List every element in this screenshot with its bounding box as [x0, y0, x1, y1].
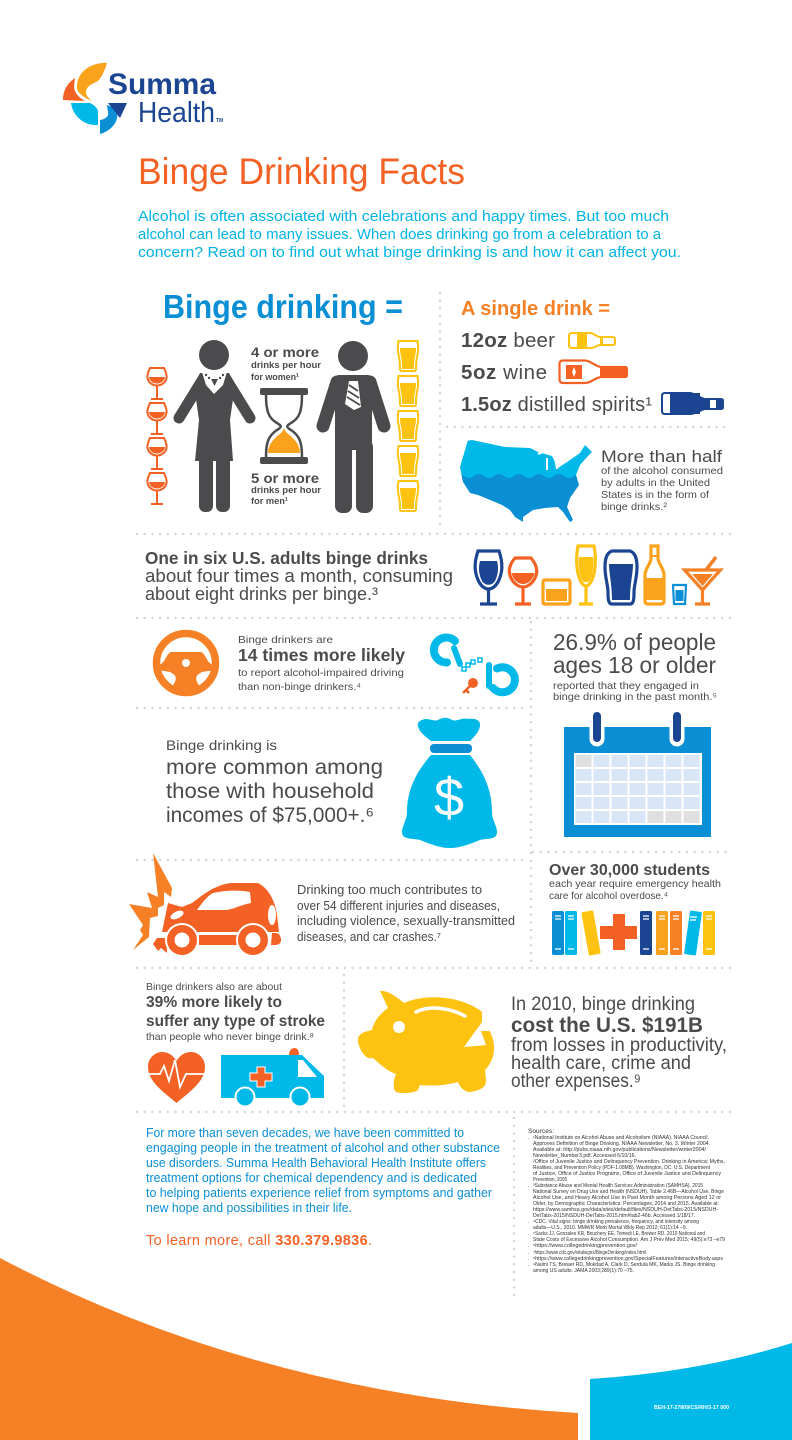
text: 4 or more: 4 or more — [251, 344, 319, 360]
text: over 30,000 students: Over 30,000 students — [549, 862, 710, 879]
sources: . — [528, 1243, 529, 1249]
sources: https://www.samhsa.gov/data/sites/default/files/NSDUH-DetTabs-2015/NSDUH- — [533, 1207, 718, 1213]
intro text: alcohol can lead to many issues. When does drinking go from a celebration to a — [138, 227, 662, 243]
text: more than half: More than half — [601, 447, 722, 466]
sources: National Survey on Drug Use and Health (NSDUH). Table 2.46B—Alcohol Use, Binge — [533, 1189, 724, 1195]
icon: broken piggy bank — [358, 991, 500, 1093]
icon: woman — [179, 340, 250, 512]
heading: a single drink =: A single drink = — [461, 298, 610, 320]
icon: row of drinks — [475, 546, 720, 604]
icon: lightning crash — [129, 853, 172, 950]
text: 14 times: Binge drinkers are — [238, 634, 333, 646]
text: 1.5oz distilled spirits: 1.5oz distilled spirits¹ — [461, 394, 652, 416]
text: 54 injuries: Drinking too much contributes to — [297, 883, 482, 897]
text: over 30,000 students — [549, 862, 721, 902]
text: cost $191B: cost the U.S. $191B — [511, 1013, 703, 1037]
text: cost $191B: In 2010, binge drinking — [511, 994, 695, 1015]
text: 14 times: than non-binge drinkers.⁴ — [238, 681, 361, 693]
text: 14 times: 14 times more likely — [238, 645, 405, 665]
icon: car — [153, 883, 281, 957]
footer: blue panel with job code — [590, 1343, 792, 1440]
sources: . — [528, 1250, 529, 1256]
text: 5 or more: drinks per hour — [251, 485, 321, 496]
text: more common: incomes of $75,000+.⁶ — [166, 804, 374, 827]
sources: State Costs of Excessive Alcohol Consumption. Am J Prev Med 2015; 49(5):e73 –e79 — [533, 1237, 725, 1243]
logo: Summa Health: TM — [216, 118, 223, 124]
text: 4 or more: drinks per hour — [251, 360, 321, 371]
text: 39 percent: 39% more likely to — [146, 994, 282, 1011]
icon: ambulance — [221, 1048, 324, 1106]
text: 14 times — [238, 634, 405, 693]
call to action: To learn more, call 330.379.9836. — [146, 1233, 372, 1249]
text block: behavioral health institute: engaging people in the treatment of alcohol and other substance — [146, 1141, 500, 1155]
text: 5 or more: for men¹ — [251, 496, 288, 507]
panel: a single drink — [461, 298, 723, 416]
sources: Available at: http://pubs.niaaa.nih.gov/publications/Newsletter/winter2004/ — [533, 1147, 707, 1153]
text: 26.9 percent: 26.9% of people — [553, 629, 716, 655]
text: one in six adults: about eight drinks per binge.³ — [145, 584, 378, 604]
heading: binge drinking =: Binge drinking = — [163, 288, 403, 325]
panel: more than half — [460, 440, 722, 522]
icon: hourglass — [260, 388, 308, 464]
text: 4 or more: for women¹ — [251, 372, 299, 383]
footer: blue panel with job code: BEH-17-27809/CS/RH/3-17 000 — [654, 1405, 729, 1411]
text: 12oz beer: 12oz beer — [461, 329, 555, 352]
panel: household income — [166, 718, 497, 848]
panel: car crash — [129, 853, 515, 957]
sources: adults—U.S., 2010. MMWR Morb Mortal Wkly Rep 2012; 61(1):14 –9. — [533, 1225, 687, 1231]
panel: 26.9 percent — [553, 629, 717, 837]
sources: ⁸https://www.collegedrinkingprevention.gov/SpecialFeatures/interactiveBody.aspx — [533, 1256, 724, 1262]
sources: of Justice, Office of Justice Programs, Office of Juvenile Justice and Delinquency — [533, 1171, 722, 1177]
icon: wine glasses — [147, 368, 167, 504]
icon: steering wheel — [156, 634, 216, 692]
text: cost $191B: from losses in productivity, — [511, 1035, 727, 1056]
panel: 14 times more likely — [156, 634, 515, 693]
icon: beer bottle — [569, 333, 615, 348]
text block: behavioral health institute: new hope and possibilities in their life. — [146, 1201, 352, 1215]
icon: heart with pulse — [148, 1052, 205, 1103]
text: more common: Binge drinking is — [166, 737, 277, 753]
icon: US map — [460, 440, 592, 522]
text: 39 percent: suffer any type of stroke — [146, 1013, 325, 1030]
intro text: concern? Read on to find out what binge drinking is and how it can affect you. — [138, 245, 681, 261]
sources: Realities, and Prevention Policy (PDF-1.08MB). Washington, DC: U.S. Department — [533, 1165, 711, 1171]
text: 5oz wine: 5oz wine — [461, 361, 547, 384]
text: 54 injuries: over 54 different injuries and diseases, — [297, 899, 500, 913]
text: 26.9 percent: binge drinking in the past month.⁵ — [553, 691, 717, 703]
sources: . — [528, 1262, 529, 1268]
intro text — [138, 209, 681, 261]
panel: 30,000 students — [549, 862, 721, 956]
sources: . — [528, 1183, 529, 1189]
sources: DetTabs-2015/NSDUH-DetTabs-2015.htm#tab2-46b. Accessed 1/18/17. — [533, 1213, 695, 1219]
sources: ³Substance Abuse and Mental Health Services Administration (SAMHSA). 2015 — [533, 1183, 703, 1189]
panel: stroke — [146, 981, 325, 1106]
text block: behavioral health institute: use disorders. Summa Health Behavioral Health Institute offers — [146, 1156, 486, 1170]
text: 4 or more — [251, 344, 321, 383]
icon: handcuffs and key — [434, 638, 515, 693]
text: more than half: States is in the form of — [601, 489, 709, 501]
text: more than half: of the alcohol consumed — [601, 465, 723, 477]
text: more than half: by adults in the United — [601, 477, 710, 489]
text: 39 percent: Binge drinkers also are about — [146, 981, 282, 993]
text block: behavioral health institute — [146, 1126, 500, 1215]
text: one in six adults: One in six U.S. adults binge drinks — [145, 548, 428, 568]
text: 39 percent: than people who never binge drink.⁸ — [146, 1031, 314, 1043]
text: cost $191B: health care, crime and — [511, 1053, 691, 1074]
text: more common: more common among — [166, 756, 383, 779]
sources — [528, 1129, 725, 1274]
panel: one in six — [145, 546, 720, 604]
sources: ⁶https://www.collegedrinkingprevention.gov/ — [533, 1243, 638, 1249]
text: 26.9 percent: reported that they engaged in — [553, 680, 699, 692]
panel: binge drinking definition — [147, 288, 418, 513]
text: 54 injuries — [297, 883, 515, 944]
footer: orange swoosh — [0, 1258, 578, 1440]
text: more than half — [601, 447, 723, 513]
icon: money bag: $ — [434, 768, 464, 828]
logo: Summa Health: Summa — [108, 68, 216, 101]
text: more than half: binge drinks.² — [601, 501, 668, 513]
text block: behavioral health institute: to helping patients experience relief from symptoms and gather — [146, 1186, 492, 1200]
text block: behavioral health institute: For more than seven decades, we have been committed to — [146, 1126, 464, 1140]
text: 14 times: to report alcohol-impaired driving — [238, 667, 404, 679]
sources: ⁵Sacks JJ, Gonzales KR, Bouchery EE, Tomedi LE, Brewer RD. 2010 National and — [533, 1231, 705, 1237]
sources: Approves Definition of Binge Drinking. NIAAA Newsletter, No. 3, Winter 2004. — [533, 1141, 710, 1147]
icon: man — [323, 341, 384, 513]
sources: . — [528, 1231, 529, 1237]
sources: ⁷https://www.cdc.gov/vitalsigns/BingeDrinking/index.html — [533, 1250, 646, 1256]
panel: cost of binge drinking — [358, 991, 727, 1093]
text: 26.9 percent — [553, 629, 717, 703]
icon: wine bottle — [560, 360, 627, 383]
text: more common: those with household — [166, 780, 374, 803]
text: more common — [166, 737, 383, 827]
sources: . — [528, 1256, 529, 1262]
text: one in six adults: about four times a month, consuming — [145, 566, 453, 586]
text: 5 or more — [251, 470, 321, 507]
sources: Prevention, 2005 — [533, 1177, 567, 1183]
text: one in six adults — [145, 548, 453, 604]
sources: . — [528, 1219, 529, 1225]
sources: ²Office of Juvenile Justice and Delinquency Prevention. Drinking in America: Myths, — [533, 1159, 725, 1165]
text: 5 or more: 5 or more — [251, 470, 319, 486]
title: Binge Drinking Facts — [138, 151, 465, 192]
sources: Older, by Demographic Characteristics: Percentages, 2014 and 2015. Available at: — [533, 1201, 719, 1207]
text: 26.9 percent: ages 18 or older — [553, 652, 716, 678]
text: 54 injuries: diseases, and car crashes.⁷ — [297, 930, 441, 944]
logo: Summa Health — [63, 63, 223, 134]
text: cost $191B: other expenses.⁹ — [511, 1071, 641, 1092]
text: over 30,000 students: care for alcohol overdose.⁴ — [549, 890, 668, 902]
sources: Alcohol Use, and Heavy Alcohol Use in Past Month among Persons Aged 12 or — [533, 1195, 721, 1201]
icon: spirits bottle — [662, 393, 723, 414]
text: 39 percent — [146, 981, 325, 1043]
icon: money bag — [402, 718, 497, 848]
icon: calendar — [564, 716, 711, 837]
sources: Sources: — [528, 1129, 554, 1135]
logo: Summa Health: Health — [138, 97, 215, 129]
text: 54 injuries: including violence, sexually-transmitted — [297, 914, 515, 928]
text: cost $191B — [511, 994, 727, 1092]
icon: beer glasses — [398, 341, 418, 511]
intro text: Alcohol is often associated with celebrations and happy times. But too much — [138, 209, 669, 225]
sources: ⁹Naimi TS, Brewer RD, Mokdad A, Clark D, Serdula MK, Marks JS. Binge drinking — [533, 1262, 715, 1268]
sources: . — [528, 1135, 529, 1141]
sources: Newsletter_Number3.pdf. Accessed 6/10/16. — [533, 1153, 636, 1159]
text block: behavioral health institute: treatment options for chemical dependency and is dedicated — [146, 1171, 477, 1185]
sources: ⁴CDC. Vital signs: binge drinking prevalence, frequency, and intensity among — [533, 1219, 699, 1225]
sources: ¹National Institute on Alcohol Abuse and Alcoholism (NIAAA). NIAAA Council. — [533, 1135, 709, 1141]
text: over 30,000 students: each year require emergency health — [549, 878, 721, 890]
icon: books and medical cross — [552, 910, 715, 956]
sources: among US adults. JAMA 2003;289(1):70 –75. — [533, 1268, 634, 1274]
